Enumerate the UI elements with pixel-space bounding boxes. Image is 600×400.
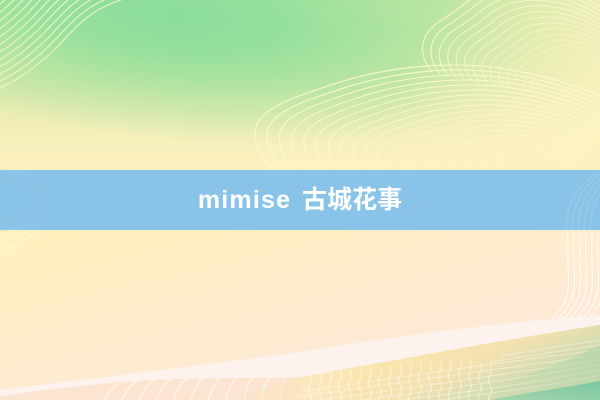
upper gradient background bbox=[0, 0, 600, 170]
wave lines: top right bbox=[422, 0, 600, 94]
wavy vertical stripes bbox=[308, 360, 492, 400]
wave lines: top left bbox=[0, 0, 126, 92]
title: mimise 古城花事 bbox=[198, 186, 402, 214]
lower sand wave with stripes bbox=[0, 315, 600, 400]
pale wave band bbox=[0, 315, 600, 396]
green corner wave bbox=[490, 381, 600, 400]
horizontal stripes bbox=[290, 340, 600, 400]
wave lines: lower right bbox=[552, 232, 600, 318]
peach underlay bbox=[0, 354, 300, 400]
green haze bbox=[450, 345, 600, 400]
wave lines: central hill bbox=[255, 65, 600, 186]
gold sand area bbox=[230, 325, 600, 400]
lower gradient background bbox=[0, 230, 600, 400]
faint arcs bbox=[100, 360, 304, 400]
blue title band bbox=[0, 170, 600, 230]
wave lines: lower left bbox=[0, 216, 42, 255]
